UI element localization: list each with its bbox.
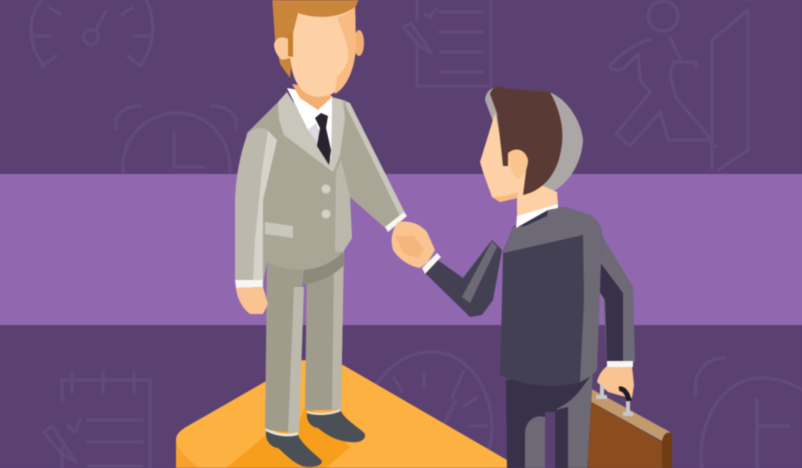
jacket (500, 207, 602, 386)
handshake hands (392, 221, 435, 268)
face and neck (480, 113, 558, 216)
buttons (322, 184, 330, 194)
face shadow (335, 7, 356, 94)
ears (274, 37, 290, 60)
hair (490, 86, 562, 195)
left arm (235, 128, 277, 281)
icon: alarm clock top (116, 106, 236, 172)
near leg (265, 262, 304, 432)
shirt and collar (287, 88, 332, 160)
tie (315, 113, 331, 165)
head grey rim (485, 88, 583, 195)
lapels (278, 92, 333, 172)
cuff (385, 212, 407, 232)
right arm (viewer side) (340, 100, 405, 228)
figure: left businessman in grey suit (235, 0, 407, 467)
cuff (607, 361, 633, 367)
icon: gauge bottom center (372, 352, 492, 450)
hair (272, 0, 361, 78)
icon: person walking through door (610, 0, 750, 170)
left hand (236, 287, 268, 314)
pocket (265, 222, 293, 238)
briefcase (588, 387, 672, 468)
briefcase handle (596, 385, 633, 414)
pants (506, 372, 593, 468)
platform (176, 360, 507, 468)
hair sideburn (288, 33, 293, 57)
hand on briefcase (597, 366, 634, 398)
figure: right businessman in dark suit (392, 86, 672, 468)
icon: calendar checklist bottom left (44, 372, 150, 468)
icon: clipboard top (403, 0, 491, 86)
viewer-side arm (425, 240, 502, 317)
jacket body (240, 100, 352, 282)
shoe: far (307, 411, 365, 442)
jacket front panel (335, 160, 352, 252)
shoe: near (266, 431, 322, 467)
platform shadow under shoes (220, 405, 350, 468)
jacket shoulder and side panel (503, 207, 602, 382)
face (290, 7, 356, 97)
collar (513, 209, 548, 227)
back arm with briefcase (600, 232, 635, 362)
icon: gauge top left (31, 0, 153, 66)
icon: alarm clock bottom right (695, 358, 802, 468)
far leg (305, 246, 344, 410)
neck (292, 84, 331, 110)
ear (508, 149, 528, 179)
